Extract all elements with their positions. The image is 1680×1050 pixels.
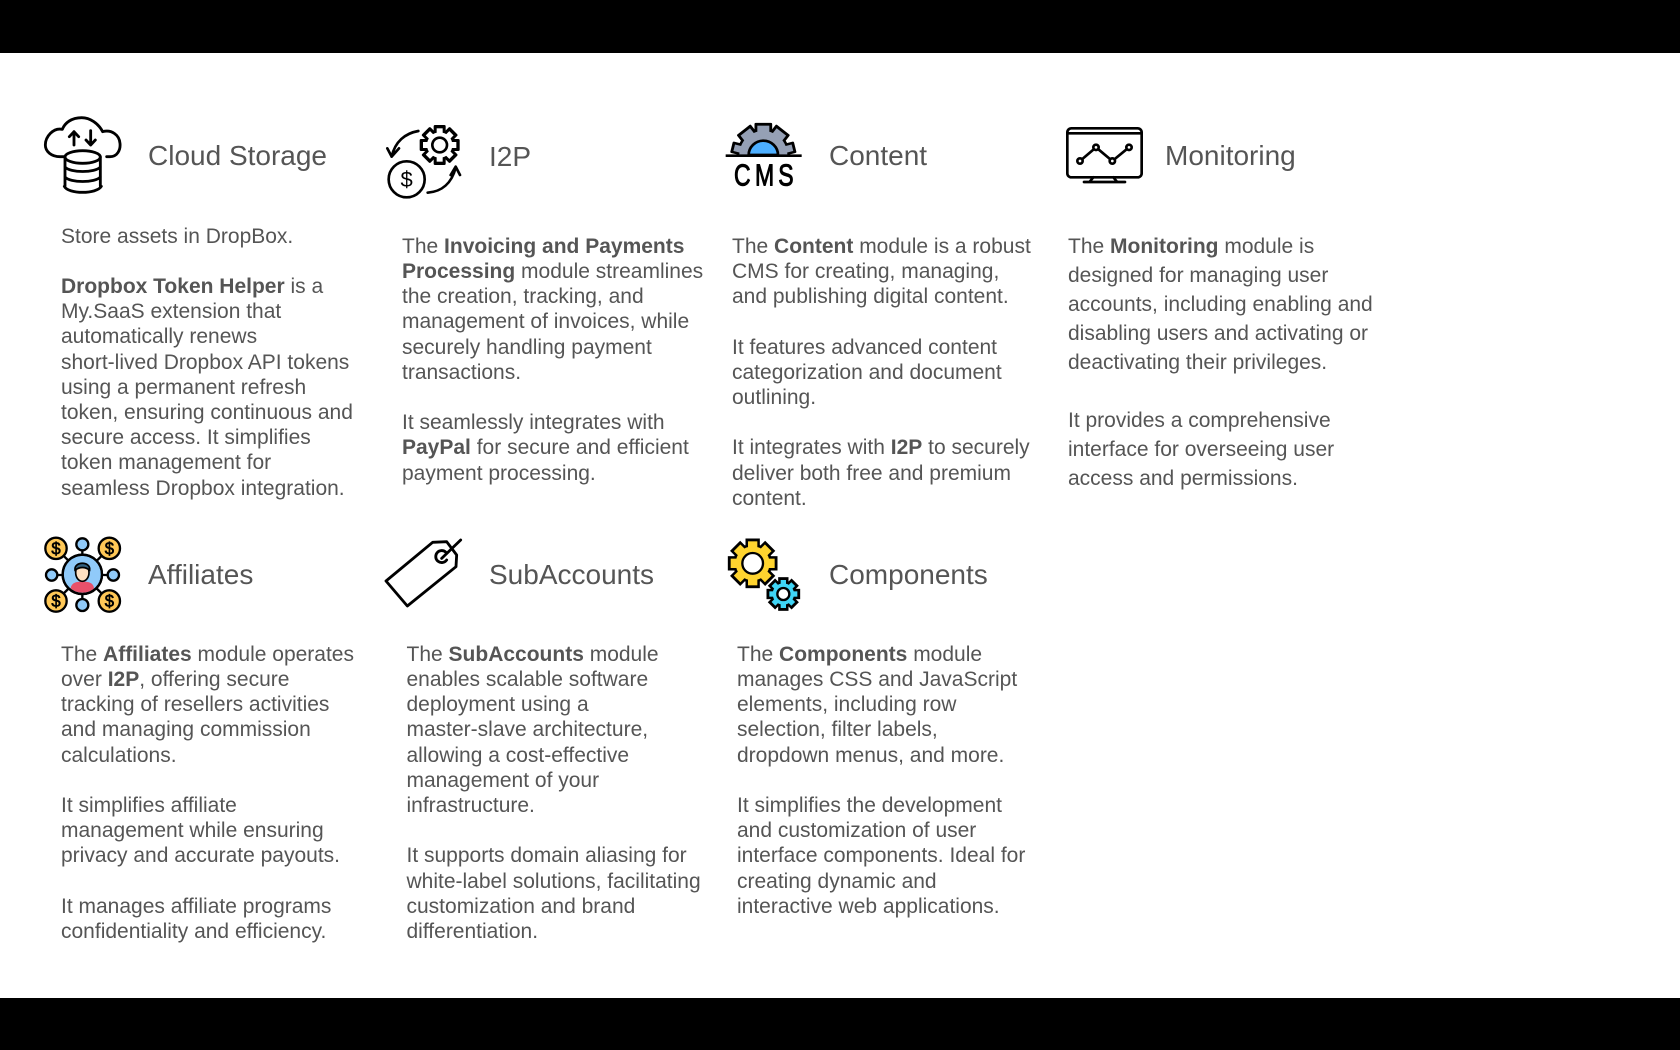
text: Content description: content. (732, 487, 807, 510)
text: Components description: interface components. Ideal for (737, 844, 1025, 867)
text: Affiliates description: The Affiliates module operates (61, 643, 354, 666)
text: Affiliates description: It manages affiliate programs (61, 895, 331, 918)
top black bar (0, 0, 1680, 53)
heading: Content: Content (829, 140, 927, 171)
text: Cloud Storage description: Store assets in DropBox. (61, 225, 293, 248)
text: Monitoring description: It provides a comprehensive (1068, 409, 1331, 432)
text: Affiliates description (61, 643, 354, 943)
text: Content description: deliver both free and premium (732, 462, 1011, 485)
icon: affiliate network: $ (105, 592, 114, 611)
text: SubAccounts description: deployment using a (406, 693, 589, 716)
icon: affiliate network: $ (105, 539, 114, 558)
text: Cloud Storage description: seamless Dropbox integration. (61, 477, 345, 500)
text: SubAccounts description: white-label solutions, facilitating (406, 870, 701, 893)
icon: payment cycle: $ (401, 167, 413, 192)
text: Affiliates description: management while ensuring (61, 819, 324, 842)
text: Cloud Storage description: automatically renews (61, 325, 257, 348)
text: SubAccounts description: enables scalable software (406, 668, 648, 691)
text: Cloud Storage description: My.SaaS extension that (61, 300, 281, 323)
text: Components description: selection, filter labels, (737, 718, 938, 741)
text: I2P description: management of invoices, while (402, 310, 689, 333)
text: Cloud Storage description: using a permanent refresh (61, 376, 306, 399)
text: Cloud Storage description: token management for (61, 451, 271, 474)
text: Components description: interactive web applications. (737, 895, 1000, 918)
heading: Cloud Storage: Cloud Storage (148, 140, 327, 171)
text: Affiliates description: privacy and accurate payouts. (61, 844, 340, 867)
icon: gears (728, 538, 800, 611)
text: I2P description: The Invoicing and Payments (402, 235, 684, 258)
panel: I2P (386, 125, 703, 485)
icon: price tag (384, 538, 462, 608)
icon: CMS gear: CMS (734, 157, 794, 192)
heading: I2P: I2P (489, 141, 531, 172)
text: Content description: outlining. (732, 386, 816, 409)
icon: affiliate network: $ (51, 592, 61, 611)
text: I2P description: Processing module streamlines (402, 260, 703, 283)
icon: cloud with database (44, 116, 122, 194)
text: I2P description: transactions. (402, 361, 521, 384)
icon: affiliate network (44, 536, 122, 613)
text: Cloud Storage description (61, 225, 353, 500)
text: I2P description (402, 235, 703, 485)
text: Monitoring description: The Monitoring module is (1068, 235, 1314, 258)
text: Content description: The Content module is a robust (732, 235, 1031, 258)
text: Monitoring description: accounts, including enabling and (1068, 293, 1373, 316)
text: Content description: CMS for creating, managing, (732, 260, 999, 283)
text: Cloud Storage description: secure access. It simplifies (61, 426, 311, 449)
text: Content description: and publishing digital content. (732, 285, 1009, 308)
bottom black bar (0, 998, 1680, 1050)
text: Components description: The Components module (737, 643, 982, 666)
text: SubAccounts description: infrastructure. (406, 794, 535, 817)
text: I2P description: PayPal for secure and efficient (402, 436, 689, 459)
text: Components description: creating dynamic and (737, 870, 937, 893)
text: Affiliates description: over I2P, offering secure (61, 668, 289, 691)
text: Affiliates description: confidentiality and efficiency. (61, 920, 326, 943)
text: SubAccounts description: differentiation. (406, 920, 538, 943)
text: Monitoring description: deactivating their privileges. (1068, 351, 1327, 374)
icon: affiliate network: $ (51, 539, 61, 558)
heading: Monitoring: Monitoring (1165, 140, 1296, 171)
text: I2P description: securely handling payment (402, 336, 652, 359)
panel: Monitoring (1066, 127, 1373, 490)
text: SubAccounts description: master-slave architecture, (406, 718, 648, 741)
text: Monitoring description: designed for managing user (1068, 264, 1328, 287)
text: SubAccounts description: management of your (406, 769, 599, 792)
panel: Cloud Storage (44, 116, 353, 500)
text: Monitoring description (1068, 235, 1373, 490)
text: Cloud Storage description: token, ensuring continuous and (61, 401, 353, 424)
text: Monitoring description: disabling users and activating or (1068, 322, 1368, 345)
text: Affiliates description: It simplifies affiliate (61, 794, 237, 817)
heading: SubAccounts: SubAccounts (489, 559, 654, 590)
text: SubAccounts description (406, 643, 701, 943)
text: SubAccounts description: It supports domain aliasing for (406, 844, 687, 867)
text: I2P description: the creation, tracking, and (402, 285, 644, 308)
panel: Affiliates (44, 536, 354, 943)
text: Monitoring description: interface for overseeing user (1068, 438, 1334, 461)
text: Cloud Storage description: short-lived Dropbox API tokens (61, 351, 349, 374)
heading: Affiliates: Affiliates (148, 559, 253, 590)
text: Affiliates description: and managing commission (61, 718, 311, 741)
text: I2P description: payment processing. (402, 462, 596, 485)
text: Components description: and customization of user (737, 819, 976, 842)
text: Content description: categorization and document (732, 361, 1002, 384)
text: Affiliates description: tracking of resellers activities (61, 693, 329, 716)
icon: CMS gear (726, 122, 802, 192)
text: SubAccounts description: allowing a cost-effective (406, 744, 629, 767)
text: I2P description: It seamlessly integrates with (402, 411, 665, 434)
heading: Components: Components (829, 559, 988, 590)
text: Content description (732, 235, 1031, 510)
panel: Components (728, 538, 1026, 918)
icon: payment cycle (386, 125, 462, 199)
text: Components description: elements, including row (737, 693, 956, 716)
text: Cloud Storage description: Dropbox Token Helper is a (61, 275, 323, 298)
panel: Content (726, 122, 1031, 510)
text: Content description: It integrates with I2P to securely (732, 436, 1030, 459)
icon: monitor with line chart (1066, 127, 1143, 184)
text: Components description: dropdown menus, and more. (737, 744, 1004, 767)
text: Components description (737, 643, 1026, 918)
text: Affiliates description: calculations. (61, 744, 177, 767)
text: Components description: It simplifies the development (737, 794, 1002, 817)
text: Monitoring description: access and permissions. (1068, 467, 1298, 490)
panel: SubAccounts (384, 538, 701, 943)
text: Content description: It features advanced content (732, 336, 997, 359)
text: SubAccounts description: The SubAccounts module (406, 643, 659, 666)
text: Components description: manages CSS and JavaScript (737, 668, 1017, 691)
text: SubAccounts description: customization and brand (406, 895, 635, 918)
